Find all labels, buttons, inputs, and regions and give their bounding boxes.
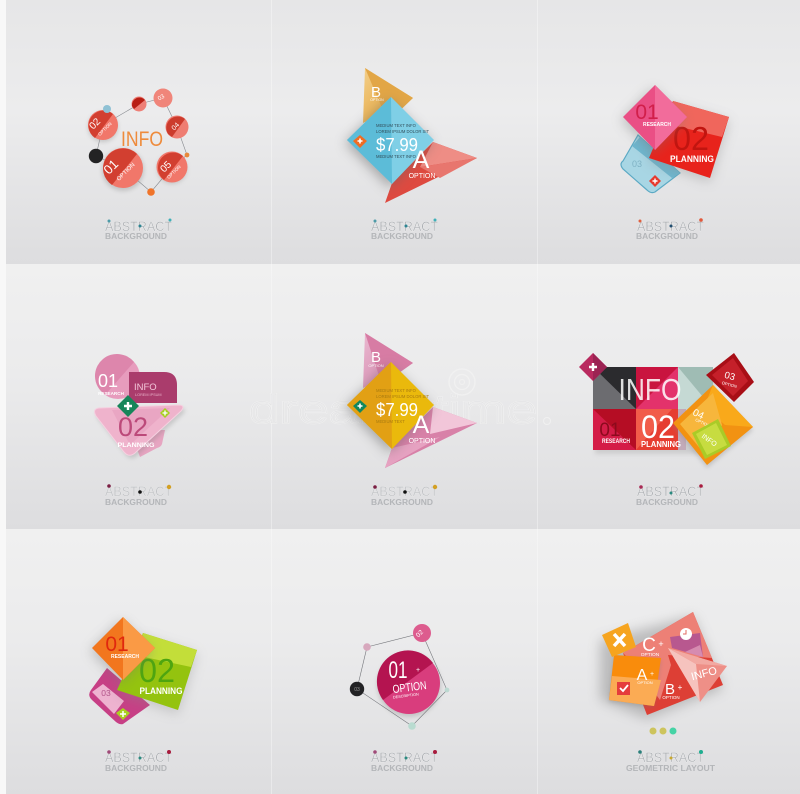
red square: OPTION bbox=[662, 695, 680, 700]
pink circle: 01 bbox=[98, 371, 118, 391]
planning cell bbox=[636, 409, 686, 450]
green planning card bbox=[117, 633, 197, 714]
footer: panel 6: ABSTRACT bbox=[637, 483, 704, 499]
price diamond gold bbox=[345, 362, 434, 453]
orange square: OPTION bbox=[695, 417, 711, 428]
crimson cell bbox=[636, 367, 678, 409]
circle 04: 04 bbox=[171, 122, 181, 132]
main circle: DESCRIPTION bbox=[393, 692, 419, 700]
footer: panel 1 bbox=[105, 218, 172, 241]
info rounded card: LOREM IPSUM bbox=[135, 393, 162, 397]
red square bbox=[623, 612, 723, 715]
research cell: 01 bbox=[599, 420, 621, 441]
footer: panel 3 bbox=[636, 218, 704, 241]
grid shadow bbox=[595, 371, 715, 454]
footer: panel 4 bbox=[105, 483, 172, 507]
red square: + bbox=[658, 639, 664, 649]
triangle B: B bbox=[371, 84, 381, 101]
small orange node bbox=[185, 153, 189, 157]
main rounded triangle: PLANNING bbox=[118, 442, 154, 449]
red planning card: PLANNING bbox=[670, 154, 714, 165]
red planning card bbox=[649, 101, 729, 182]
footer: panel 5: BACKGROUND bbox=[371, 497, 433, 507]
triangle B: OPTION bbox=[370, 98, 384, 102]
triangle A bbox=[385, 142, 477, 203]
lime plus badge bbox=[160, 408, 170, 418]
pink circle: RESEARCH bbox=[98, 391, 125, 396]
main circle: 01 bbox=[388, 657, 408, 684]
footer: panel 7: ABSTRACT bbox=[105, 749, 172, 765]
price diamond: $7.99 bbox=[376, 134, 418, 155]
triangle A pink bbox=[385, 407, 477, 468]
circle 02: 02 bbox=[87, 116, 103, 132]
node teal bottom bbox=[408, 722, 416, 730]
orange square bbox=[673, 385, 753, 468]
main rounded triangle bbox=[95, 405, 185, 458]
back card bbox=[130, 430, 165, 457]
price diamond gold: LOREM IPSUM DOLOR SIT bbox=[376, 394, 429, 399]
circle 05: OPTION bbox=[166, 164, 182, 180]
pyramid: INFO bbox=[690, 665, 719, 683]
circle 05: 05 bbox=[158, 159, 174, 175]
price diamond gold: MEDIUM TEXT INFO bbox=[376, 388, 417, 393]
connector lines bbox=[96, 98, 187, 192]
circle 03: 03 bbox=[157, 94, 166, 102]
03 square: 03 bbox=[723, 370, 736, 383]
footer: panel 8: BACKGROUND bbox=[371, 763, 433, 773]
yellow x square bbox=[602, 623, 636, 657]
triangle B pink: OPTION bbox=[368, 363, 384, 368]
research cell bbox=[593, 409, 636, 450]
pink circle bbox=[95, 354, 140, 399]
circle 01 bbox=[100, 148, 144, 191]
footer: panel 3: BACKGROUND bbox=[636, 231, 698, 241]
triangle B pink: B bbox=[371, 349, 381, 366]
footer: panel 3: ABSTRACT bbox=[637, 218, 704, 234]
footer: panel 5: ABSTRACT bbox=[371, 483, 438, 499]
green planning card: PLANNING bbox=[140, 686, 182, 697]
green planning card: 02 bbox=[139, 652, 175, 689]
green plus badge bbox=[353, 400, 367, 413]
footer: panel 2: BACKGROUND bbox=[371, 231, 433, 241]
node teal right bbox=[445, 688, 449, 692]
option label: OPTION bbox=[409, 173, 435, 180]
letter A: A bbox=[413, 146, 430, 174]
footer: panel 2: ABSTRACT bbox=[371, 218, 438, 234]
footer: panel 7: BACKGROUND bbox=[105, 763, 167, 773]
triangle B pink bbox=[363, 333, 413, 388]
red square: OPTION bbox=[641, 652, 660, 658]
footer: panel 4: BACKGROUND bbox=[105, 497, 167, 507]
footer: panel 8 bbox=[371, 749, 438, 773]
orange node bbox=[147, 188, 155, 196]
INFO word: INFO bbox=[618, 372, 682, 407]
03 square bbox=[706, 353, 754, 402]
red planning card: 02 bbox=[673, 120, 709, 157]
red square: B bbox=[665, 681, 675, 698]
red square: C bbox=[642, 635, 656, 656]
pink research diamond: RESEARCH bbox=[643, 122, 671, 128]
info rounded card: INFO bbox=[134, 382, 157, 393]
node black: 03 bbox=[354, 687, 360, 693]
green plus badge bbox=[117, 395, 139, 417]
footer: panel 1: ABSTRACT bbox=[105, 218, 172, 234]
blue node bbox=[103, 105, 111, 113]
research cell: RESEARCH bbox=[602, 439, 630, 445]
footer: panel 9: ABSTRACT bbox=[637, 749, 704, 765]
footer: panel 9: GEOMETRIC LAYOUT bbox=[626, 763, 716, 773]
circle 01: 01 bbox=[100, 156, 121, 177]
main circle bbox=[377, 650, 441, 717]
main rounded triangle: 02 bbox=[118, 412, 148, 442]
panel: geometric layout bbox=[600, 612, 727, 734]
price diamond: MEDIUM TEXT INFO bbox=[376, 123, 417, 128]
orange research diamond: RESEARCH bbox=[111, 654, 139, 660]
green square bbox=[692, 419, 731, 459]
price diamond: LOREM IPSUM DOLOR SIT bbox=[376, 129, 429, 134]
panel: info grid bbox=[579, 353, 754, 468]
panel: research planning orange green bbox=[89, 617, 197, 724]
planning cell: PLANNING bbox=[641, 440, 681, 449]
footer: panel 7 bbox=[105, 749, 172, 773]
purple panel bbox=[670, 633, 703, 657]
orange research diamond: 01 bbox=[105, 633, 129, 656]
plus diamond bbox=[579, 353, 607, 381]
orange square bbox=[609, 655, 661, 708]
footer: panel 9 bbox=[626, 749, 716, 773]
price diamond: MEDIUM TEXT INFO bbox=[376, 154, 417, 159]
dark cell bbox=[593, 367, 636, 409]
main circle: + bbox=[416, 667, 420, 674]
triangle B bbox=[363, 68, 413, 123]
footer: panel 6: BACKGROUND bbox=[636, 497, 698, 507]
panel: price triangles blue bbox=[345, 68, 477, 203]
orange square: 04 bbox=[691, 407, 706, 422]
footer: panel 8: ABSTRACT bbox=[371, 749, 438, 765]
orange square: A bbox=[637, 667, 648, 684]
pink research diamond: 01 bbox=[635, 101, 659, 124]
main circle: OPTION bbox=[392, 680, 427, 696]
magenta rounded card: 03 bbox=[101, 688, 111, 698]
node pink bbox=[363, 643, 371, 651]
watermark: dreamstime bbox=[249, 388, 537, 432]
panel: info circles bbox=[87, 88, 189, 196]
orange square: OPTION bbox=[637, 680, 653, 685]
price diamond gold: MEDIUM TEXT bbox=[376, 419, 405, 424]
green square: INFO bbox=[700, 433, 718, 449]
letter A: A bbox=[413, 411, 430, 439]
blue rounded card: 03 bbox=[632, 159, 642, 169]
panel: pink research planning bbox=[95, 354, 185, 458]
plus badge orange bbox=[353, 135, 367, 148]
pink research diamond bbox=[621, 85, 687, 153]
planning cell: 02 bbox=[641, 409, 675, 445]
footer: panel 6 bbox=[636, 483, 704, 507]
panel: price triangles gold bbox=[345, 333, 477, 468]
INFO label: INFO bbox=[121, 128, 163, 151]
orange square: + bbox=[650, 671, 654, 678]
03 square: OPTION bbox=[721, 380, 738, 389]
price diamond bbox=[345, 97, 434, 188]
black node bbox=[89, 149, 103, 163]
panel: research planning red bbox=[621, 85, 729, 193]
pagination dots bbox=[650, 728, 676, 734]
option label: OPTION bbox=[409, 438, 435, 445]
network lines bbox=[357, 633, 447, 726]
clock bbox=[680, 628, 692, 640]
panel: option circle network bbox=[350, 624, 449, 730]
red square: + bbox=[678, 683, 683, 692]
circle 02 bbox=[87, 110, 118, 142]
footer: panel 1: BACKGROUND bbox=[105, 231, 167, 241]
large shadow bbox=[600, 616, 723, 719]
info rounded card bbox=[129, 372, 177, 403]
circle dark red node bbox=[132, 96, 146, 112]
node 02: 02 bbox=[415, 629, 425, 639]
orange research diamond bbox=[90, 617, 155, 683]
price diamond gold: $7.99 bbox=[376, 399, 418, 420]
circle 02: OPTION bbox=[97, 121, 113, 137]
watermark bbox=[249, 369, 550, 432]
teal cell bbox=[678, 367, 713, 409]
footer: panel 5 bbox=[371, 483, 438, 507]
circle 01: OPTION bbox=[116, 162, 137, 183]
footer: panel 2 bbox=[371, 218, 438, 241]
footer: panel 4: ABSTRACT bbox=[105, 483, 172, 499]
circle 05 bbox=[156, 152, 188, 184]
watermark: dreamstime bbox=[249, 388, 537, 432]
